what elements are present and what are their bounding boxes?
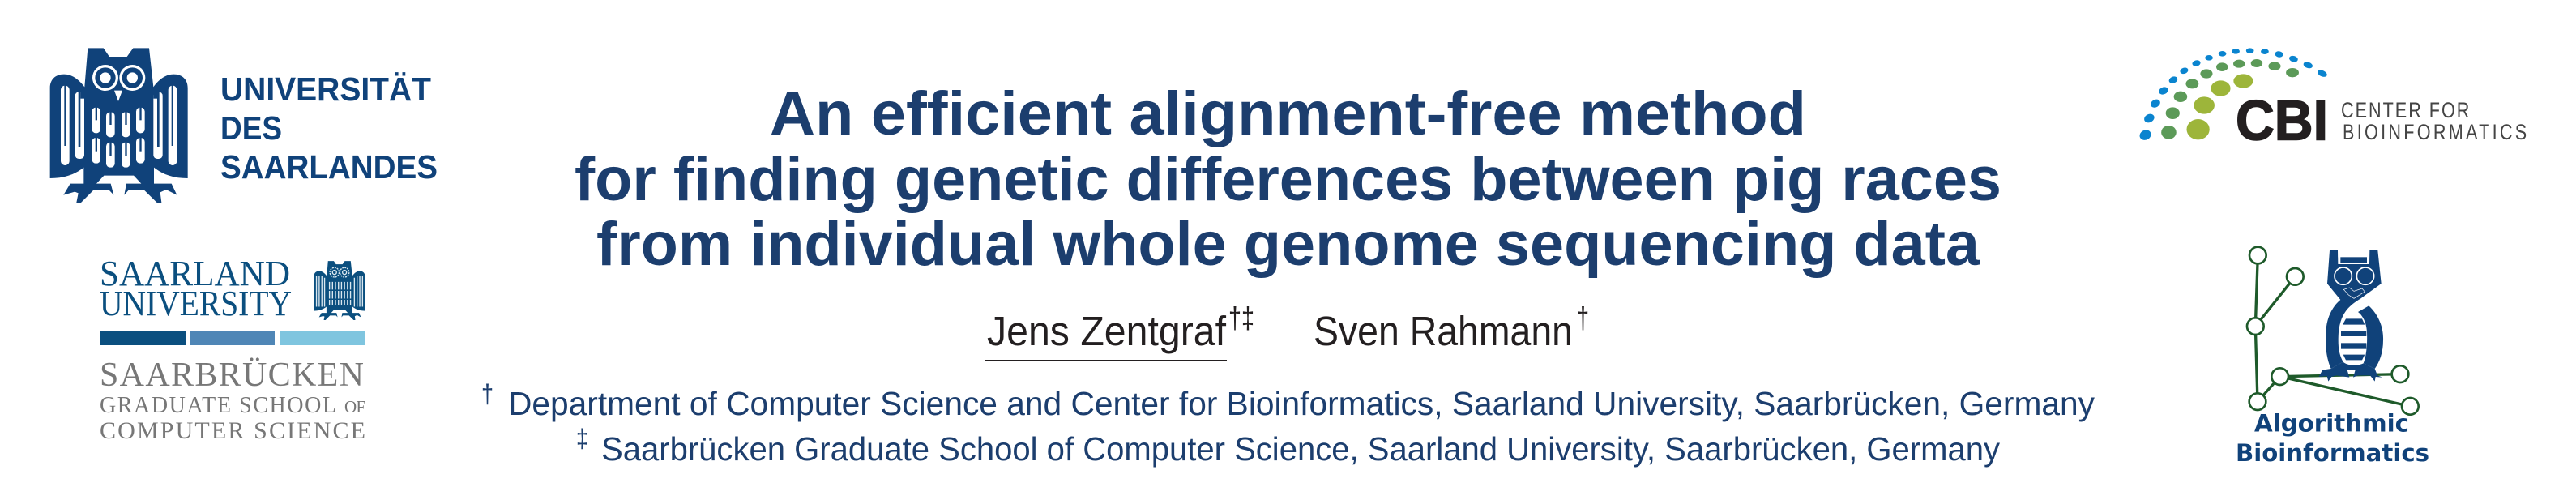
- affiliation 1: Department of Computer Science and Center for Bioinformatics, Saarland University, Saarbrücken, Germany: [508, 385, 2095, 422]
- logo: Algorithmic Bioinformatics: [2236, 247, 2429, 467]
- icon: Saarland University owl: [50, 48, 188, 203]
- title: for finding genetic differences between pig races: [575, 145, 2001, 214]
- wordmark: Center for Bioinformatics: BIOINFORMATICS: [2343, 121, 2527, 145]
- wordmark: Saarland University: UNIVERSITY: [100, 284, 292, 323]
- wordmark: Saarland University: [100, 254, 292, 323]
- title: from individual whole genome sequencing data: [596, 210, 1980, 279]
- wordmark: graduate school: GRADUATE SCHOOL: [100, 393, 336, 418]
- colour bars: [100, 331, 365, 345]
- logo: Universität des Saarlandes: [50, 48, 438, 203]
- title: [575, 79, 2001, 279]
- wordmark: CBI: CBI: [2236, 89, 2328, 152]
- wordmark: graduate school: [100, 357, 365, 444]
- author: Sven Rahmann: Sven Rahmann: [1314, 308, 1573, 354]
- title: An efficient alignment-free method: [770, 79, 1806, 148]
- affiliations: [481, 379, 2095, 468]
- logo: Center for Bioinformatics: [2138, 48, 2527, 152]
- wordmark: graduate school: SAARBRÜCKEN: [100, 357, 364, 394]
- author: Jens Zentgraf: Jens Zentgraf: [987, 308, 1227, 354]
- wordmark: Bioinformatics: Bioinformatics: [2236, 439, 2429, 467]
- icon: tree with DNA owl: [2247, 247, 2419, 415]
- author: Jens Zentgraf: †‡: [1228, 301, 1254, 335]
- wordmark: Universität des Saarlandes: SAARLANDES: [220, 148, 438, 186]
- wordmark: Universität des Saarlandes: UNIVERSITÄT: [220, 70, 431, 108]
- wordmark: Saarland University: SAARLAND: [100, 254, 290, 293]
- affiliation 2: ‡: [576, 424, 588, 453]
- logo: Saarbrücken Graduate School of Computer Science: [100, 254, 365, 444]
- wordmark: graduate school: COMPUTER SCIENCE: [100, 417, 365, 444]
- authors: [985, 301, 1589, 361]
- wordmark: Universität des Saarlandes: DES: [220, 109, 282, 147]
- wordmark: Center for Bioinformatics: [2341, 99, 2527, 145]
- icon: dotted arc: [2138, 48, 2328, 142]
- wordmark: Universität des Saarlandes: [220, 70, 438, 186]
- wordmark: graduate school: OF: [344, 397, 365, 417]
- wordmark: Center for Bioinformatics: CENTER FOR: [2341, 99, 2469, 123]
- affiliation 2: Saarbrücken Graduate School of Computer Science, Saarland University, Saarbrücken, Germany: [601, 430, 2000, 468]
- affiliation 1: †: [481, 379, 493, 408]
- author: Sven Rahmann: †: [1577, 301, 1589, 335]
- icon: small owl: [314, 261, 365, 320]
- wordmark: Algorithmic: Algorithmic: [2254, 410, 2409, 438]
